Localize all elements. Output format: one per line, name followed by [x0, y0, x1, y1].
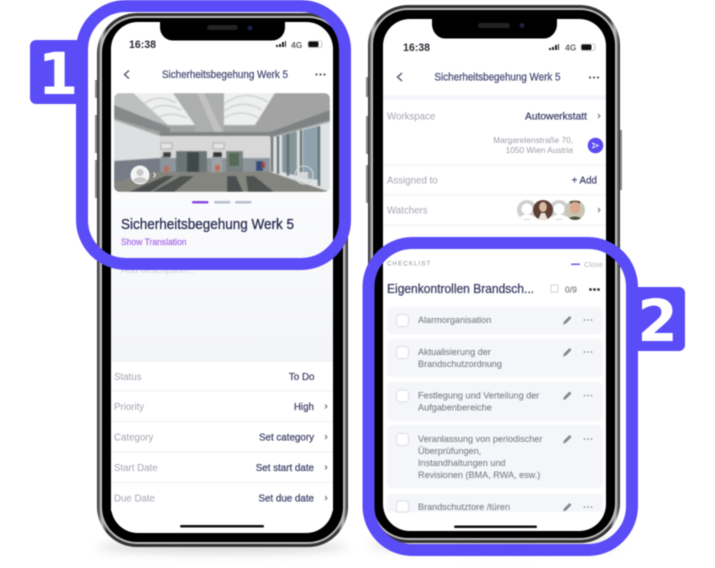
- checklist item: Alarmorganisation: [387, 307, 603, 334]
- phone 1 properties: Set category: [259, 432, 314, 444]
- phone 1 properties: Start Date: [114, 463, 158, 474]
- phone 2 side buttons: [366, 77, 622, 203]
- checklist item: Veranlassung: [387, 425, 603, 488]
- phone 2 status bar: [403, 42, 595, 54]
- checklist title: Eigenkontrollen Brandsch...: [387, 281, 534, 296]
- phone 2 status bar: 16:38: [403, 42, 430, 54]
- highlight ring 1: [82, 6, 345, 264]
- phone 1 side buttons: [95, 80, 350, 198]
- carousel indicators: [192, 201, 252, 204]
- checklist item: Veranlassung: Überprüfungen,: [418, 446, 481, 456]
- number badge 2: 2: [637, 287, 678, 355]
- phone 1 body: [97, 13, 348, 547]
- photo map icon: [295, 166, 313, 184]
- phone 1 properties: Set start date: [256, 463, 315, 474]
- checklist item: Aktualisierung: Aktualisierung der: [418, 347, 491, 357]
- phone 1 properties: [111, 361, 333, 504]
- phone 1 screen: [111, 22, 333, 533]
- phone 1 properties: To Do: [289, 372, 315, 383]
- phone 1 properties: Priority: [114, 402, 144, 413]
- phone 2 status bar: 4G: [565, 42, 577, 52]
- checklist item: Veranlassung: Revisionen (BMA, RWA, esw.): [418, 470, 540, 480]
- checklist header: [387, 260, 603, 269]
- checklist title: 0/9: [565, 284, 577, 294]
- workspace row: [387, 112, 603, 155]
- phone 1 status bar: 4G: [291, 40, 303, 50]
- watchers row: [387, 200, 600, 220]
- workspace row: Margaretenstraße 70,: [493, 135, 573, 145]
- phone 1 status bar: 16:38: [129, 39, 156, 51]
- phone 1 properties: Status: [114, 372, 142, 383]
- phone 2 home indicator: [454, 526, 537, 528]
- workspace row: Autowerkstatt: [525, 112, 587, 122]
- checklist item: Aktualisierung: [387, 339, 603, 377]
- phone 1 header: Sicherheitsbegehung Werk 5: [162, 69, 288, 81]
- phone 1 header: [124, 69, 326, 81]
- checklist item: Alarmorganisation: Alarmorganisation: [418, 315, 491, 325]
- checklist item: Festlegung: [387, 382, 603, 421]
- checklist item: Veranlassung: Instandhaltungen und: [418, 458, 505, 468]
- assigned to row: + Add: [572, 176, 597, 186]
- phone 1 home indicator: [180, 525, 264, 528]
- highlight ring 2: [368, 243, 632, 550]
- watchers row: Watchers: [387, 206, 428, 216]
- workspace row: 1050 Wien Austria: [506, 145, 573, 155]
- phone 2 screen: [383, 19, 606, 531]
- photo avatar: [130, 166, 156, 184]
- checklist item: Veranlassung: Veranlassung von periodischer: [418, 434, 542, 444]
- phone 1 properties: Due Date: [114, 494, 155, 504]
- phone 2 notch: [432, 19, 557, 38]
- assigned to row: Assigned to: [387, 176, 438, 186]
- show translation link: Show Translation: [121, 237, 186, 247]
- watcher avatars: [517, 200, 585, 220]
- assigned to row: [387, 176, 597, 186]
- phone 1 notch: [160, 22, 285, 40]
- phone 1 shadow: [97, 541, 347, 553]
- checklist header: CHECKLIST: [387, 260, 431, 268]
- phone 1: [95, 13, 350, 553]
- add description placeholder: Add description...: [121, 265, 194, 276]
- phone 1 status bar: [129, 39, 322, 51]
- checklist item: Aktualisierung: Brandschutzordnung: [418, 359, 502, 369]
- checklist item: Brandschutztore: Brandschutztore /türen: [418, 502, 510, 512]
- checklist item: Brandschutztore: [387, 494, 603, 512]
- phone 2 header: Sicherheitsbegehung Werk 5: [434, 72, 560, 84]
- workspace row: Workspace: [387, 112, 435, 122]
- workshop photo: [114, 93, 330, 192]
- phone 1 properties: High: [294, 402, 314, 413]
- phone 2 shadow: [369, 539, 619, 551]
- checklist item: Festlegung: Aufgabenbereiche: [418, 402, 492, 412]
- number badge 1: 1: [38, 40, 78, 108]
- phone 2 body: [368, 5, 620, 543]
- location button: [588, 138, 603, 153]
- phone 1 properties: Set due date: [258, 494, 315, 504]
- task title: Sicherheitsbegehung Werk 5: [121, 217, 294, 233]
- checklist header: Close: [584, 260, 603, 269]
- phone 2 header: [398, 72, 599, 84]
- phone 1 properties: Category: [114, 432, 153, 444]
- phone 2: [366, 5, 622, 551]
- checklist item: Festlegung: Festlegung und Verteilung der: [418, 390, 539, 400]
